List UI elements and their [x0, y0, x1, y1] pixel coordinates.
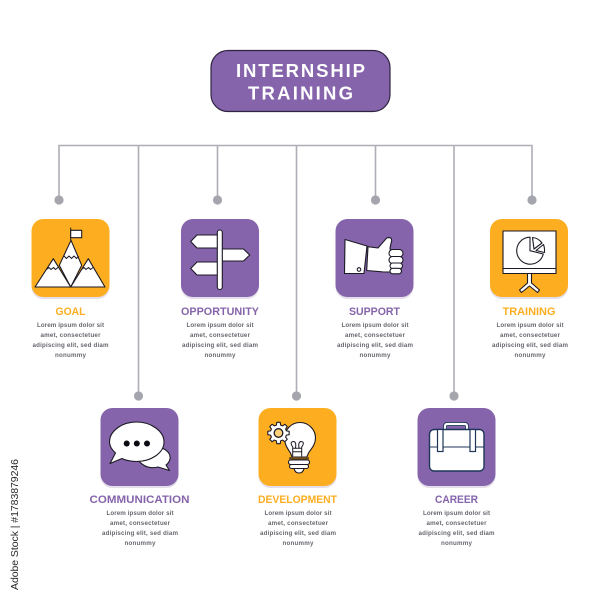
description: nonummy: [204, 352, 236, 359]
description: Lorem ipsum dolor sit: [342, 322, 408, 329]
description: Lorem ipsum dolor sit: [106, 510, 174, 517]
card: training: [490, 219, 568, 359]
icon: thumbs up: [344, 238, 403, 274]
description: nonummy: [441, 540, 473, 547]
description: nonummy: [124, 540, 156, 547]
description: amet, consectetuer: [345, 332, 406, 339]
icon: presentation board: [503, 231, 556, 292]
description: amet, consectetuer: [110, 520, 171, 527]
description: nonummy: [514, 352, 546, 359]
connector tree: [54, 146, 537, 401]
description: adipiscing elit, sed diam: [337, 342, 413, 349]
description: adipiscing elit, sed diam: [102, 530, 178, 537]
card: development: [258, 408, 337, 547]
description: [260, 510, 336, 547]
description: amet, consectetuer: [426, 520, 487, 527]
label: OPPORTUNITY: [181, 306, 260, 318]
description: Lorem ipsum dolor sit: [37, 322, 104, 329]
icon: light bulb with gear: [268, 422, 316, 473]
title box: [211, 50, 390, 112]
description: adipiscing elit, sed diam: [492, 342, 568, 349]
description: Lorem ipsum dolor sit: [423, 510, 490, 517]
card: communication: [90, 408, 190, 547]
description: Lorem ipsum dolor sit: [186, 322, 254, 329]
card: opportunity: [181, 219, 260, 359]
description: [32, 322, 109, 359]
description: adipiscing elit, sed diam: [32, 342, 109, 349]
label: CAREER: [435, 494, 478, 506]
description: [492, 322, 568, 359]
description: nonummy: [282, 540, 314, 547]
label: COMMUNICATION: [90, 494, 190, 506]
icon: mountains with flag: [35, 228, 105, 287]
description: [182, 322, 258, 359]
label: SUPPORT: [349, 306, 400, 318]
label: TRAINING: [502, 306, 556, 318]
description: amet, consectetuer: [40, 332, 101, 339]
card: support: [336, 219, 414, 359]
icon: briefcase: [430, 424, 484, 471]
description: [102, 510, 178, 547]
label: GOAL: [56, 306, 86, 318]
stock id text: Adobe Stock | #1783879246: [9, 459, 21, 590]
icon: signpost: [191, 230, 250, 290]
icon: speech bubbles: [110, 422, 170, 470]
description: adipiscing elit, sed diam: [182, 342, 258, 349]
description: amet, consectetuer: [190, 332, 251, 339]
description: adipiscing elit, sed diam: [260, 530, 336, 537]
description: nonummy: [55, 352, 87, 359]
title box: INTERNSHIP: [236, 60, 365, 81]
description: amet, consectetuer: [268, 520, 329, 527]
title box: TRAINING: [248, 82, 353, 104]
description: Lorem ipsum dolor sit: [264, 510, 332, 517]
description: amet, consectetuer: [500, 332, 561, 339]
description: [337, 322, 413, 359]
card: career: [418, 408, 496, 547]
description: nonummy: [360, 352, 391, 359]
card: goal: [32, 219, 110, 359]
description: Lorem ipsum dolor sit: [496, 322, 564, 329]
description: [418, 510, 495, 547]
label: DEVELOPMENT: [258, 494, 337, 506]
description: adipiscing elit, sed diam: [418, 530, 495, 537]
